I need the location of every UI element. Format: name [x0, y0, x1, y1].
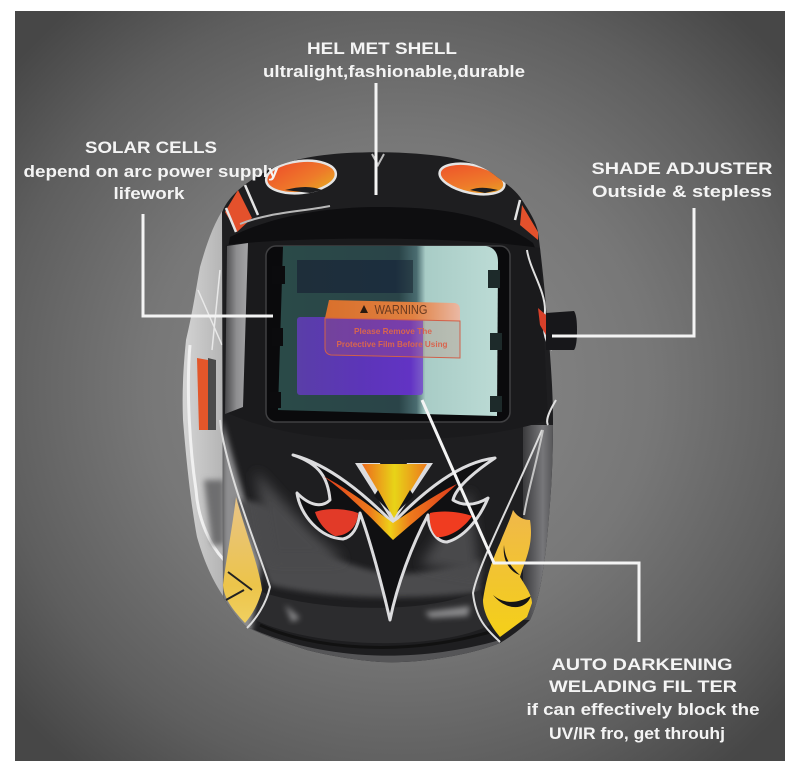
callout: auto darkening filter — [422, 400, 760, 743]
emblem right eye — [430, 512, 472, 537]
callout: solar cells: lifework — [114, 185, 185, 203]
solar cell strip — [297, 260, 413, 293]
callout: helmet shell — [263, 39, 525, 195]
visor recess — [225, 239, 548, 440]
emblem triangle — [355, 463, 433, 523]
chin shading and gloss — [222, 420, 556, 665]
top red ovals — [225, 154, 538, 240]
leader line: shell — [374, 83, 378, 195]
callout: solar cells: SOLAR CELLS — [85, 138, 217, 157]
eagle emblem — [293, 455, 495, 620]
callout: helmet shell: ultralight,fashionable,durable — [263, 63, 525, 81]
warning sticker: WARNING — [374, 303, 428, 317]
left inner highlight — [225, 243, 248, 414]
callout: shade adjuster: SHADE ADJUSTER — [592, 159, 772, 178]
warning sticker: Protective Film Before Using — [336, 339, 448, 349]
visor brow — [228, 207, 536, 250]
clips — [270, 266, 285, 408]
callout: shade adjuster: Outside & stepless — [592, 182, 772, 201]
welding helmet — [183, 152, 577, 665]
purple filter window — [297, 317, 423, 395]
callout: helmet shell: HEL MET SHELL — [307, 39, 457, 58]
callout: auto darkening filter: AUTO DARKENING — [552, 655, 732, 674]
emblem red band — [323, 476, 457, 540]
warning sticker — [325, 300, 460, 358]
callout: solar cells — [24, 138, 279, 316]
helmet side shell — [183, 205, 260, 620]
auto darkening filter — [266, 246, 510, 422]
leader line: adjuster — [552, 208, 694, 336]
helmet side pinstripes and red flame — [188, 270, 224, 560]
callout: auto darkening filter: UV/IR fro, get throuhj — [549, 724, 725, 743]
callout: solar cells: depend on arc power supply — [24, 163, 279, 181]
warning sticker: Please Remove The — [354, 326, 432, 336]
right edge pinstripes — [527, 250, 556, 425]
left side flame — [220, 420, 270, 628]
callout: auto darkening filter: if can effectively block the — [526, 700, 760, 719]
leader line: filter — [422, 400, 639, 642]
shade adjuster knob — [538, 308, 577, 350]
helmet front shell — [222, 152, 553, 662]
callout: auto darkening filter: WELADING FIL TER — [549, 677, 737, 696]
emblem left eye — [315, 509, 358, 536]
callout: shade adjuster — [552, 159, 772, 336]
right side flame — [473, 430, 543, 642]
leader line: solar — [143, 214, 273, 316]
